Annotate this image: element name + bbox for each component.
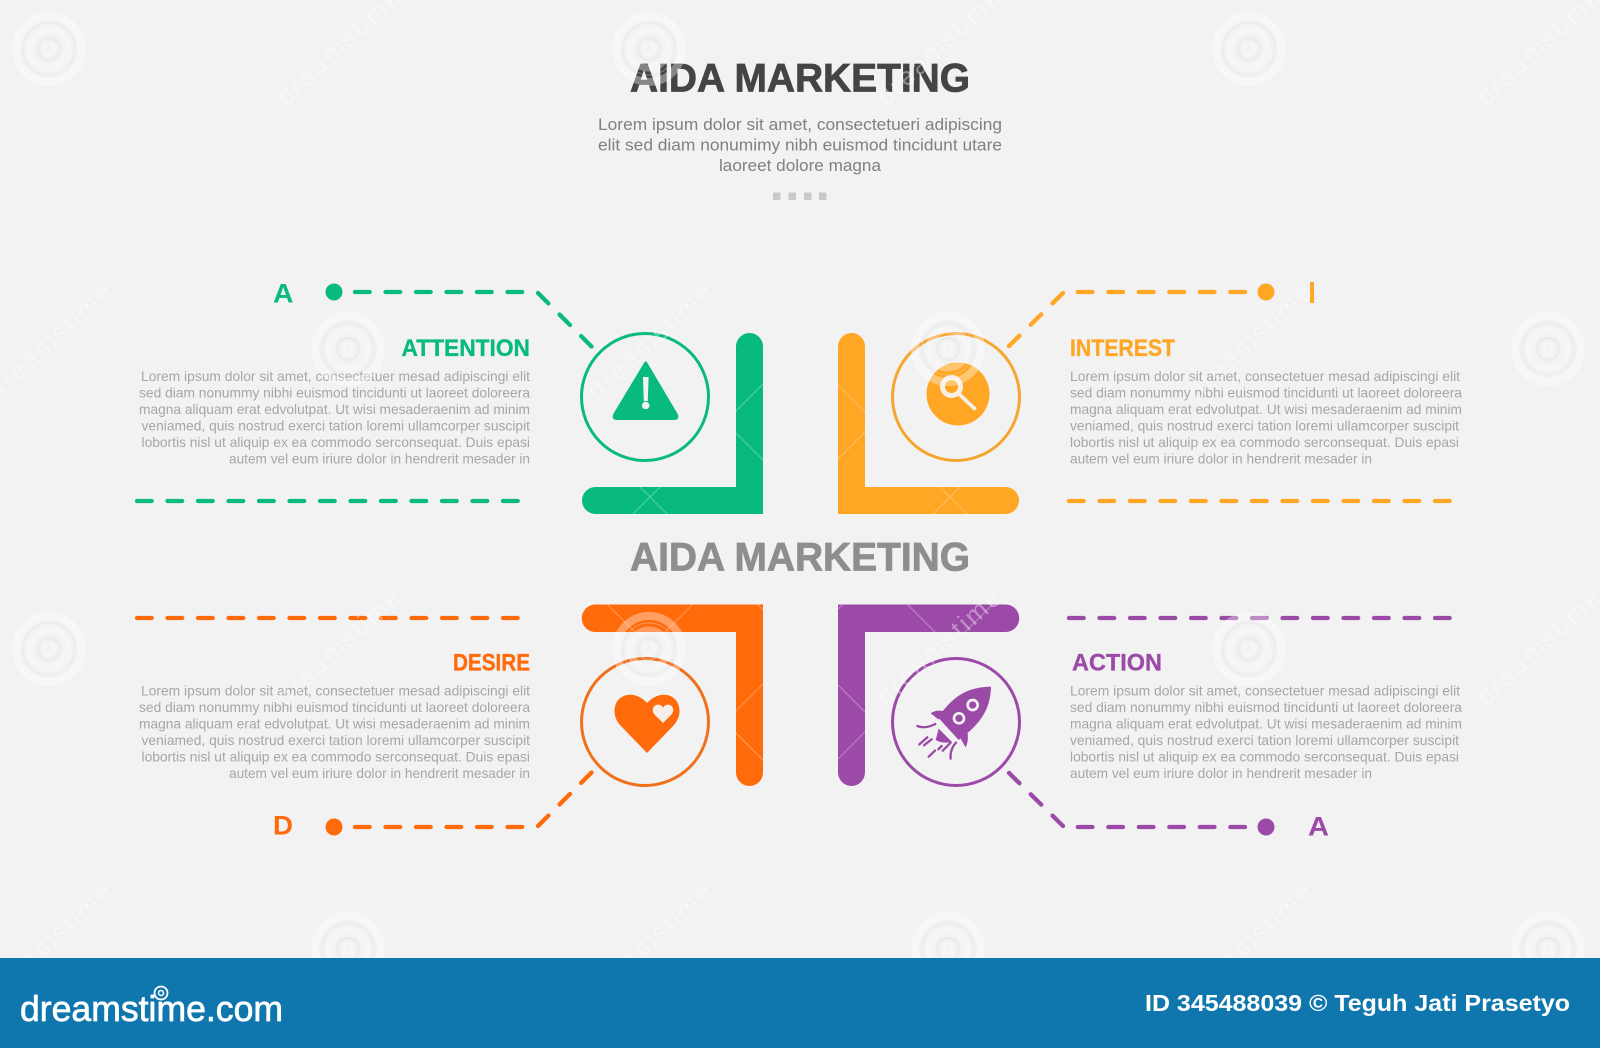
text: interest: lobortis nisl ut aliquip ex ea commodo serconsequat. Duis epasi <box>1070 435 1459 450</box>
panel: action <box>838 604 1462 842</box>
connector: action <box>1007 618 1453 836</box>
watermark overlay: dreamstime <box>581 877 718 1005</box>
text: interest <box>1070 369 1462 466</box>
text: interest: veniamed, quis nostrud exerci tation loremi ullamcorper suscipit <box>1070 418 1459 434</box>
text: attention: autem vel eum iriure dolor in hendrerit mesader in <box>229 452 530 466</box>
corner bracket: attention <box>582 333 763 514</box>
connector: interest <box>1007 284 1453 501</box>
text: desire: autem vel eum iriure dolor in hendrerit mesader in <box>229 766 530 781</box>
text: desire: Lorem ipsum dolor sit amet, consectetuer mesad adipiscingi elit <box>141 684 530 698</box>
icon: rocket <box>892 658 1020 786</box>
subtitle text: laoreet dolore magna <box>719 156 882 175</box>
text: action: magna aliquam erat edvolutpat. Ut wisi mesaderaenim ad minim <box>1070 716 1462 732</box>
footer bar <box>0 958 1600 1048</box>
watermark overlay: dreamstime <box>870 583 1007 711</box>
watermark overlay: dreamstime <box>1181 277 1318 405</box>
connector: attention <box>137 284 593 501</box>
text: desire: lobortis nisl ut aliquip ex ea commodo serconsequat. Duis epasi <box>142 750 530 764</box>
heading: attention: ATTENTION <box>402 335 530 362</box>
text: attention: Lorem ipsum dolor sit amet, consectetuer mesad adipiscingi elit <box>141 369 530 384</box>
heading: desire: DESIRE <box>453 650 530 676</box>
watermark overlay: dreamstime <box>581 277 718 405</box>
title divider dots <box>773 192 826 200</box>
text: action: autem vel eum iriure dolor in hendrerit mesader in <box>1070 766 1372 781</box>
panel: attention <box>137 278 763 514</box>
letter A: A <box>1308 812 1329 842</box>
text: attention: veniamed, quis nostrud exerci tation loremi ullamcorper suscipit <box>142 418 530 434</box>
text: action: veniamed, quis nostrud exerci tation loremi ullamcorper suscipit <box>1070 733 1459 748</box>
letter D: D <box>273 810 293 840</box>
subtitle text: Lorem ipsum dolor sit amet, consectetueri adipiscing <box>598 115 1002 134</box>
text: action: sed diam nonummy nibhi euismod tincidunti ut laoreet doloreera <box>1070 700 1462 715</box>
corner bracket: interest <box>838 333 1019 514</box>
text: action: Lorem ipsum dolor sit amet, consectetuer mesad adipiscingi elit <box>1070 684 1460 698</box>
icon: warning triangle <box>582 334 708 460</box>
subtitle text <box>598 115 1002 175</box>
watermark overlay: dreamstime <box>1181 877 1318 1005</box>
text: attention: sed diam nonummy nibhi euismod tincidunti ut laoreet doloreera <box>139 386 530 400</box>
text: interest: Lorem ipsum dolor sit amet, consectetuer mesad adipiscingi elit <box>1070 369 1460 384</box>
text: attention: lobortis nisl ut aliquip ex ea commodo serconsequat. Duis epasi <box>142 435 530 450</box>
icon: heart <box>582 658 708 786</box>
text: action <box>1070 684 1462 781</box>
text: interest: sed diam nonummy nibhi euismod tincidunti ut laoreet doloreera <box>1070 386 1462 400</box>
letter I <box>1310 282 1314 303</box>
text: desire <box>139 684 530 781</box>
icon: magnifier <box>892 334 1020 460</box>
text: attention: magna aliquam erat edvolutpat. Ut wisi mesaderaenim ad minim <box>139 402 530 417</box>
text: interest: autem vel eum iriure dolor in hendrerit mesader in <box>1070 452 1372 466</box>
text: attention <box>139 369 530 466</box>
panel: desire <box>137 604 763 840</box>
footer logo: dreamstime.com <box>20 988 283 1029</box>
watermark overlay: dreamstime <box>270 583 407 711</box>
heading: action: ACTION <box>1072 650 1162 676</box>
text: desire: magna aliquam erat edvolutpat. Ut wisi mesaderaenim ad minim <box>139 716 530 732</box>
text: desire: sed diam nonummy nibhi euismod tincidunti ut laoreet doloreera <box>139 700 530 715</box>
text: action: lobortis nisl ut aliquip ex ea commodo serconsequat. Duis epasi <box>1070 750 1459 764</box>
corner bracket: desire <box>582 604 763 786</box>
connector: desire <box>137 618 593 836</box>
title: AIDA MARKETING <box>630 56 970 100</box>
text: interest: magna aliquam erat edvolutpat. Ut wisi mesaderaenim ad minim <box>1070 402 1462 417</box>
panel: interest <box>838 282 1462 514</box>
corner bracket: action <box>838 604 1019 786</box>
center label: AIDA MARKETING <box>630 536 970 580</box>
subtitle text: elit sed diam nonumimy nibh euismod tincidunt utare <box>598 136 1002 154</box>
text: desire: veniamed, quis nostrud exerci tation loremi ullamcorper suscipit <box>142 733 530 748</box>
letter A: A <box>273 278 294 308</box>
heading: interest: INTEREST <box>1070 335 1175 362</box>
footer credit: ID 345488039 © Teguh Jati Prasetyo <box>1145 990 1570 1016</box>
